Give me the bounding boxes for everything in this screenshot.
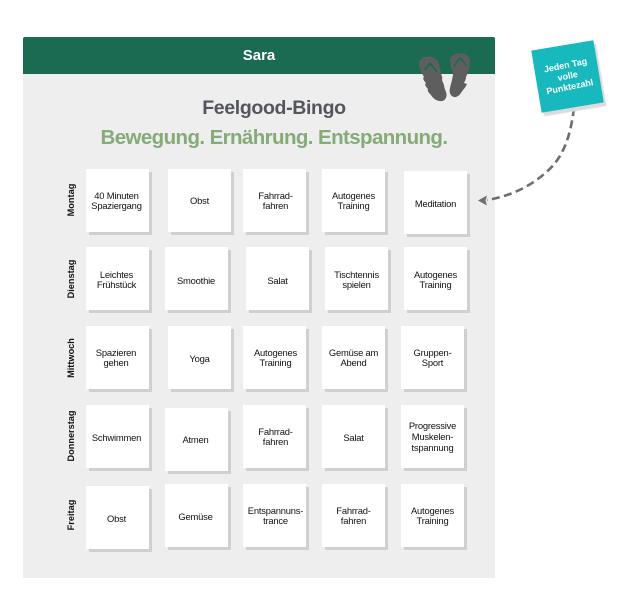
- card: Fahrradfahren: [243, 405, 306, 468]
- card: Smoothie: Smoothie: [177, 274, 215, 286]
- day label: Freitag: Freitag: [66, 500, 76, 530]
- card: Progressive Muskelentspannung: Muskelen-: [412, 431, 453, 442]
- icon: flip-flops: [419, 53, 470, 102]
- card: Progressive Muskelentspannung: [401, 405, 464, 468]
- card: Spazieren gehen: [86, 326, 149, 389]
- day label: Dienstag: Dienstag: [66, 260, 76, 298]
- card: Autogenes Training: Autogenes: [414, 268, 457, 280]
- card: Obst: [86, 486, 149, 549]
- card: Gruppen-Sport: Gruppen-: [413, 346, 452, 358]
- card: Fahrradfahren: Fahrrad-: [258, 190, 293, 200]
- card: Autogenes Training: Autogenes: [411, 504, 454, 516]
- card: 40 Minuten Spaziergang: [86, 169, 149, 232]
- card: Leichtes Frühstück: Frühstück: [97, 278, 136, 290]
- card: Tischtennis spielen: [325, 247, 388, 310]
- day label: Montag: Montag: [66, 184, 76, 216]
- card: Autogenes Training: [401, 484, 464, 547]
- card: Fahrradfahren: fahren: [263, 436, 288, 446]
- card: Gemüse: [165, 484, 228, 547]
- card: Fahrradfahren: [243, 169, 306, 232]
- card: Salat: [246, 247, 309, 310]
- panel: bingo board background: [23, 74, 495, 578]
- callout: sticky note: [531, 40, 603, 113]
- day label: Mittwoch: Mittwoch: [66, 338, 76, 378]
- card: Meditation: [404, 171, 467, 234]
- card: Gemüse am Abend: [322, 326, 385, 389]
- arrow: callout to Meditation: [478, 110, 575, 206]
- card: Gruppen-Sport: [401, 326, 464, 389]
- card: Spazieren gehen: gehen: [103, 356, 129, 368]
- card: Tischtennis spielen: spielen: [342, 278, 371, 290]
- card: Meditation: Meditation: [415, 198, 456, 208]
- card: 40 Minuten Spaziergang: 40 Minuten: [94, 190, 139, 200]
- card: Fahrradfahren: fahren: [263, 200, 288, 210]
- card: Smoothie: [165, 247, 228, 310]
- card: Entspannungstrance: [243, 484, 306, 547]
- card: Salat: Salat: [343, 432, 364, 442]
- card: Autogenes Training: Autogenes: [254, 346, 297, 358]
- card: Yoga: [168, 326, 231, 389]
- card: Gemüse: Gemüse: [178, 510, 213, 522]
- card: Gemüse am Abend: Gemüse am: [329, 346, 378, 358]
- header bar: [23, 37, 495, 74]
- card: Fahrradfahren: Fahrrad-: [258, 426, 293, 436]
- card: Progressive Muskelentspannung: tspannung: [412, 442, 454, 453]
- card: Tischtennis spielen: Tischtennis: [334, 268, 379, 280]
- card: Autogenes Training: Training: [260, 356, 291, 368]
- callout: sticky note: Punktezahl: [545, 77, 593, 96]
- card: Obst: [168, 169, 231, 232]
- card: Obst: Obst: [190, 194, 209, 206]
- card: Autogenes Training: Training: [420, 278, 451, 290]
- subtitle: Bewegung. Ernährung. Entspannung.: [101, 126, 447, 149]
- card: Autogenes Training: Training: [417, 514, 448, 526]
- card: Schwimmen: Schwimmen: [92, 432, 141, 442]
- card: Fahrradfahren: Fahrrad-: [336, 504, 371, 516]
- callout: sticky note: volle: [556, 69, 578, 83]
- card: Yoga: Yoga: [189, 352, 210, 364]
- card: Atmen: Atmen: [182, 434, 209, 444]
- callout: sticky note: Jeden Tag: [542, 56, 587, 75]
- title: Feelgood-Bingo: [202, 97, 346, 119]
- card: Gruppen-Sport: Sport: [422, 356, 443, 368]
- card: Autogenes Training: [243, 326, 306, 389]
- card: Entspannungstrance: trance: [263, 514, 288, 526]
- day label: Donnerstag: Donnerstag: [66, 410, 76, 462]
- card: Gemüse am Abend: Abend: [340, 356, 367, 368]
- card: 40 Minuten Spaziergang: Spaziergang: [91, 200, 142, 210]
- card: Progressive Muskelentspannung: Progressive: [409, 420, 456, 431]
- card: Autogenes Training: [404, 247, 467, 310]
- card: Entspannungstrance: Entspannuns-: [248, 504, 303, 516]
- card: Salat: Salat: [267, 274, 288, 286]
- card: Fahrradfahren: [322, 484, 385, 547]
- card: Spazieren gehen: Spazieren: [96, 346, 136, 358]
- card: Obst: Obst: [107, 512, 126, 524]
- card: Schwimmen: [86, 405, 149, 468]
- card: Autogenes Training: Autogenes: [332, 190, 375, 200]
- header bar: Sara: [243, 47, 275, 64]
- card: Fahrradfahren: fahren: [341, 514, 366, 526]
- card: Autogenes Training: [322, 169, 385, 232]
- card: Leichtes Frühstück: Leichtes: [100, 268, 133, 280]
- card: Atmen: [165, 408, 228, 471]
- card: Autogenes Training: Training: [338, 200, 369, 210]
- card: Salat: [322, 405, 385, 468]
- card: Leichtes Frühstück: [86, 247, 149, 310]
